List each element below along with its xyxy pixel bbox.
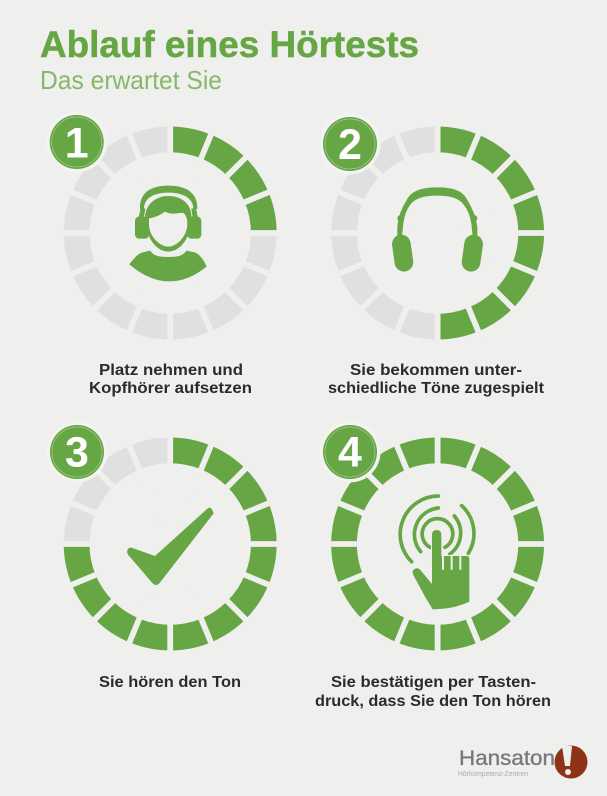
icon: person with headphones [129,186,207,281]
caption [328,362,545,397]
subtitle: Das erwartet Sie [40,65,222,95]
badge: number 2: 2 [338,121,362,169]
badge: number 2 [320,114,380,174]
caption [315,674,551,710]
caption: Platz nehmen und [99,362,243,379]
progress ring: 8 of 16 segments [326,121,550,345]
progress ring: 4 of 16 segments [58,121,282,345]
panel: step 3 [46,422,282,691]
icon: headphones [391,187,484,273]
title: Ablauf eines Hörtests [40,24,419,65]
panel: step 2 [320,114,550,397]
caption: Sie bestätigen per Tasten- [331,674,536,691]
badge: number 4: 4 [338,428,362,476]
badge: number 4 [320,422,380,482]
progress ring: 12 of 16 segments [58,432,282,656]
logo: Hansaton [458,746,588,778]
logo wordmark: Hansaton [459,747,555,770]
badge: number 1 [46,112,107,172]
panel: step 4 [315,422,551,710]
caption: Sie bekommen unter- [350,362,522,379]
badge: number 3: 3 [65,428,89,476]
icon: check mark [127,508,214,585]
logo mark: red circle with exclamation [554,746,588,778]
progress ring: 16 of 16 segments [326,432,550,656]
caption: Sie hören den Ton [99,674,241,691]
badge: number 1: 1 [65,120,89,168]
panel: step 1 [46,112,282,397]
logo tagline: Hörkompetenz-Zentren [458,771,528,778]
icon: finger pressing a button [400,496,474,609]
badge: number 3 [46,422,108,482]
caption [89,362,252,397]
caption: schiedliche Töne zugespielt [328,380,545,397]
caption: druck, dass Sie den Ton hören [315,693,551,710]
caption: Kopfhörer aufsetzen [89,380,252,397]
